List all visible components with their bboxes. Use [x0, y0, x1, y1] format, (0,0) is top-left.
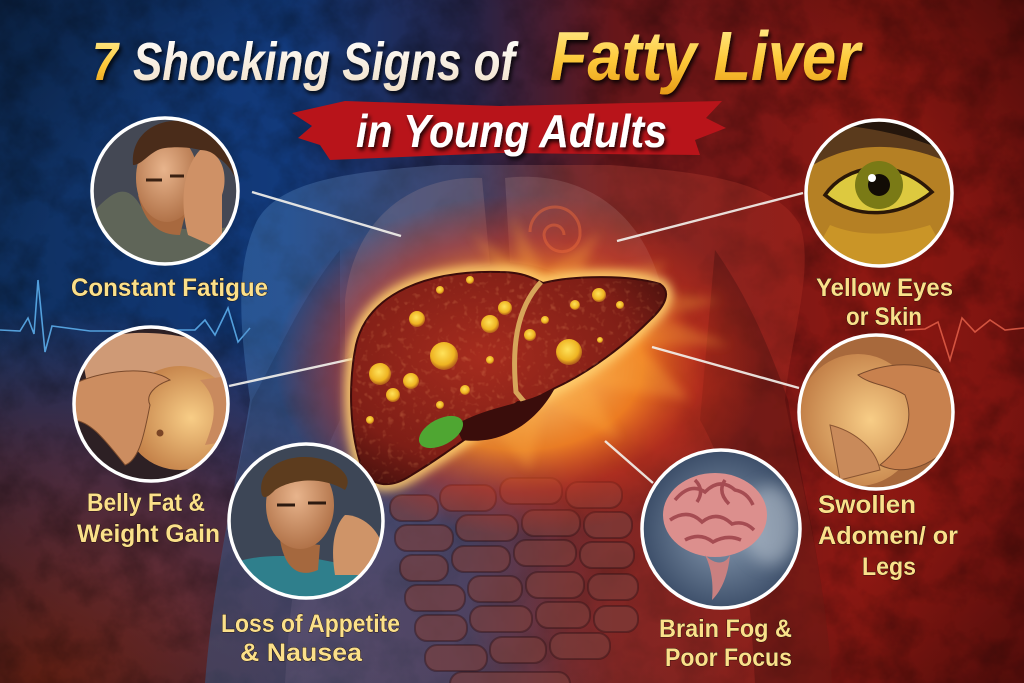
label: belly fat: Belly Fat & — [87, 489, 205, 517]
intestines — [390, 478, 638, 683]
ligament — [515, 282, 541, 404]
chest and lungs — [345, 177, 662, 360]
torso silhouette — [205, 165, 832, 683]
title line 1: 7 — [92, 32, 121, 92]
label: belly fat: Weight Gain — [77, 520, 220, 548]
label: constant fatigue: Constant Fatigue — [71, 274, 268, 302]
label: yellow eyes: or Skin — [846, 303, 922, 331]
frame: swollen abdomen — [799, 335, 953, 489]
title line 1: Fatty Liver — [550, 17, 863, 95]
frame: constant fatigue — [92, 118, 238, 264]
liver glow — [275, 195, 765, 535]
title line 1: Shocking Signs of — [133, 32, 519, 92]
label: swollen abdomen: Adomen/ or — [818, 522, 958, 550]
label: brain fog — [659, 615, 792, 672]
liver halo — [351, 272, 666, 484]
subtitle banner: in Young Adults — [356, 105, 667, 157]
gallbladder — [414, 409, 468, 455]
frame: brain — [642, 450, 800, 608]
label: swollen abdomen: Swollen — [818, 491, 916, 519]
photo: brain — [644, 452, 798, 606]
heartbeat line right — [905, 318, 1024, 360]
heartbeat line left — [0, 280, 250, 352]
label: yellow eyes — [816, 274, 953, 331]
label: swollen abdomen — [818, 491, 958, 581]
frame: belly fat — [74, 327, 228, 481]
connector lines — [229, 192, 803, 483]
label: belly fat — [77, 489, 220, 548]
arm separators — [205, 250, 340, 683]
photo: yellow eye — [805, 120, 955, 270]
stomach spiral — [530, 207, 580, 252]
label: brain fog: Poor Focus — [665, 644, 792, 672]
dark underside — [455, 388, 555, 441]
photo: swollen abdomen — [800, 336, 952, 488]
label: yellow eyes: Yellow Eyes — [816, 274, 953, 302]
photo: belly fat — [76, 328, 226, 480]
label: swollen abdomen: Legs — [862, 553, 916, 581]
title line 1 — [92, 17, 863, 95]
glow rays — [470, 215, 730, 470]
label: loss of appetite — [221, 610, 400, 667]
label: loss of appetite: & Nausea — [240, 639, 363, 667]
fat deposits — [366, 276, 624, 424]
photo: constant fatigue — [94, 120, 236, 262]
frame: loss of appetite — [229, 444, 383, 598]
label: brain fog: Brain Fog & — [659, 615, 792, 643]
liver — [345, 265, 675, 490]
frame: yellow eye — [806, 120, 952, 266]
photo: loss of appetite — [231, 446, 382, 596]
label: loss of appetite: Loss of Appetite — [221, 610, 400, 638]
